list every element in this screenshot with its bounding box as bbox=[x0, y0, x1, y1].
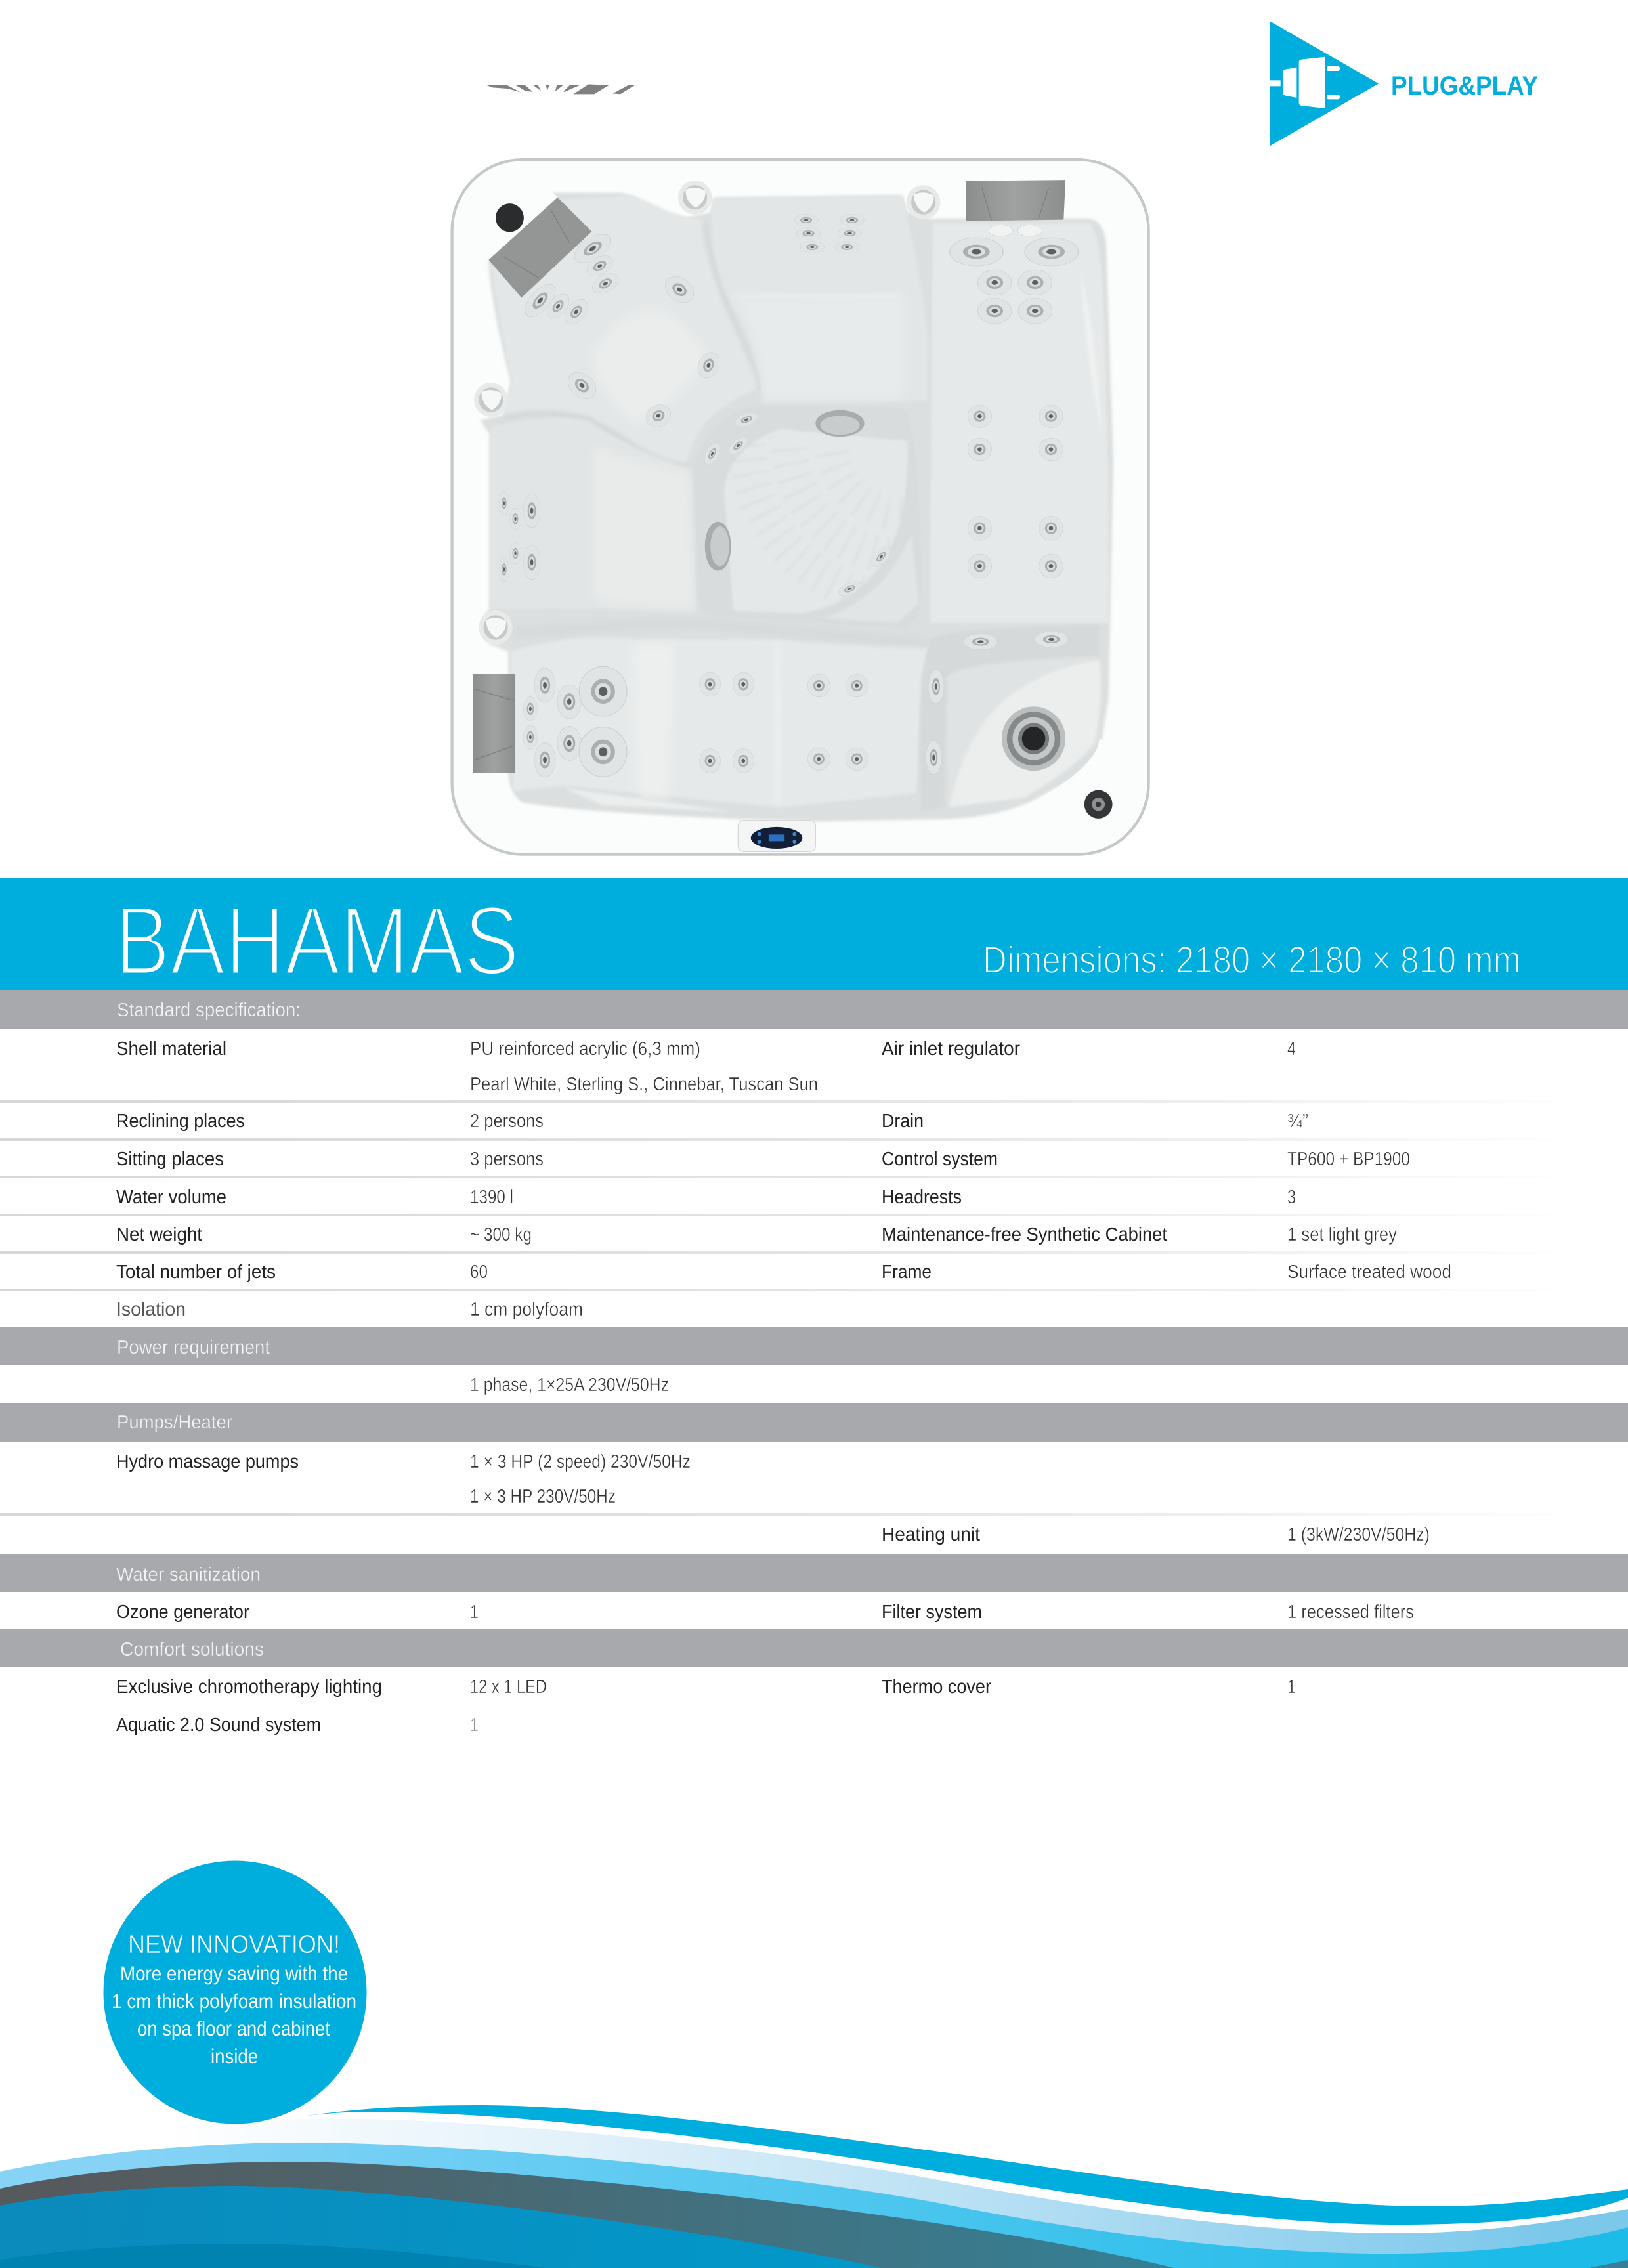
specification rows right: Drain bbox=[882, 1111, 924, 1132]
section: power requirement: Power requirement bbox=[117, 1337, 270, 1358]
section: comfort solutions: Comfort solutions bbox=[120, 1639, 264, 1660]
top left lounge seat bbox=[492, 195, 760, 466]
callout body: More energy saving with the bbox=[120, 1962, 348, 1985]
specification rows left: PU reinforced acrylic (6,3 mm) bbox=[470, 1038, 700, 1059]
specification rows right: 4 bbox=[1287, 1038, 1296, 1059]
rim bump bottom right bbox=[1029, 738, 1128, 824]
section: comfort solutions bbox=[0, 1629, 1628, 1736]
specification rows left: 2 persons bbox=[470, 1111, 544, 1132]
specification rows right: 1 set light grey bbox=[1287, 1224, 1397, 1245]
wave: light blue band bbox=[0, 2143, 1628, 2268]
drain bbox=[1002, 706, 1065, 771]
specification rows left: Net weight bbox=[116, 1224, 202, 1245]
section: comfort solutions: 12 x 1 LED bbox=[470, 1677, 547, 1698]
specification rows right: ¾” bbox=[1287, 1111, 1308, 1132]
section: power requirement bbox=[0, 1327, 1628, 1396]
specification rows right: TP600 + BP1900 bbox=[1287, 1149, 1410, 1170]
spa well bbox=[480, 193, 1113, 821]
massage jets bbox=[499, 214, 1078, 777]
dimensions: Dimensions: 2180 × 2180 × 810 mm bbox=[983, 939, 1521, 981]
section bar bbox=[0, 990, 1628, 1029]
section: water sanitization: 1 recessed filters bbox=[1287, 1602, 1414, 1623]
acrylic rim bbox=[452, 160, 1149, 855]
section: water sanitization: Water sanitization bbox=[116, 1564, 261, 1585]
section: comfort solutions: Aquatic 2.0 Sound system bbox=[116, 1715, 321, 1736]
plug and play badge bbox=[1270, 21, 1538, 146]
specification rows left: 60 bbox=[470, 1262, 488, 1283]
section: power requirement: 1 phase, 1×25A 230V/50Hz bbox=[470, 1375, 669, 1396]
callout: new innovation bbox=[104, 1860, 366, 2124]
footer waves bbox=[0, 2105, 1628, 2268]
skimmer filters bbox=[705, 410, 865, 571]
plug and play label: PLUG&PLAY bbox=[1391, 72, 1538, 100]
logo fragment artefact bbox=[487, 84, 635, 94]
left seat bbox=[490, 418, 696, 613]
specification rows left: Total number of jets bbox=[116, 1262, 276, 1283]
section: pumps and heater: 1 (3kW/230V/50Hz) bbox=[1287, 1524, 1430, 1545]
section: water sanitization: Ozone generator bbox=[116, 1602, 249, 1623]
section: water sanitization bbox=[0, 1554, 1628, 1623]
section: pumps and heater: Pumps/Heater bbox=[117, 1412, 232, 1433]
specification rows left: 3 persons bbox=[470, 1149, 544, 1170]
section: water sanitization: Filter system bbox=[882, 1602, 982, 1623]
specification rows left: 1 cm polyfoam bbox=[470, 1299, 583, 1320]
section: standard specification bbox=[0, 990, 1628, 1029]
specification rows right: Control system bbox=[882, 1149, 998, 1170]
section: pumps and heater: Heating unit bbox=[882, 1524, 980, 1545]
specification rows left: Water volume bbox=[116, 1187, 226, 1208]
section: comfort solutions: 1 bbox=[470, 1715, 479, 1736]
pillow clips bbox=[474, 181, 940, 645]
row dividers bbox=[0, 1100, 1628, 1516]
specification rows right: Headrests bbox=[882, 1187, 962, 1208]
section: pumps and heater bbox=[0, 1403, 1628, 1545]
specification rows left: Sitting places bbox=[116, 1149, 224, 1170]
specification rows left: Isolation bbox=[116, 1299, 186, 1320]
wave: corner accent bbox=[1589, 2260, 1628, 2268]
right seat bbox=[930, 223, 1109, 623]
headrest bottom left bbox=[473, 674, 515, 773]
rim bump top left bbox=[473, 181, 557, 261]
wave: slate band bbox=[0, 2162, 1174, 2268]
headrest top right bbox=[966, 180, 1065, 221]
headrest top left bbox=[488, 198, 592, 297]
callout body: 1 cm thick polyfoam insulation bbox=[112, 1990, 356, 2013]
callout heading: NEW INNOVATION! bbox=[128, 1931, 340, 1959]
specification rows right: Air inlet regulator bbox=[882, 1038, 1020, 1059]
section: comfort solutions: Thermo cover bbox=[882, 1677, 991, 1698]
footwell floor with ribs bbox=[724, 429, 907, 613]
specification rows right: 3 bbox=[1287, 1187, 1296, 1208]
specification rows left: 1390 l bbox=[470, 1187, 513, 1208]
specification rows left bbox=[116, 1038, 818, 1320]
specification rows right bbox=[882, 1038, 1451, 1283]
specification rows left: Shell material bbox=[116, 1038, 226, 1059]
callout body: on spa floor and cabinet bbox=[137, 2017, 330, 2040]
section: comfort solutions: Exclusive chromotherapy lighting bbox=[116, 1677, 382, 1698]
air controls bbox=[989, 225, 1042, 236]
wave: top swoosh bbox=[303, 2105, 1628, 2225]
title band bbox=[0, 878, 1628, 995]
specification rows left: Pearl White, Sterling S., Cinnebar, Tuscan Sun bbox=[470, 1074, 818, 1095]
top centre seat bbox=[711, 196, 928, 403]
section: pumps and heater: 1 × 3 HP (2 speed) 230V/50Hz bbox=[470, 1451, 691, 1472]
callout body: inside bbox=[211, 2045, 258, 2068]
bottom right seat bbox=[920, 625, 1101, 812]
wave: deep blue band bbox=[0, 2244, 545, 2268]
icon: speaker top left bbox=[496, 203, 524, 232]
section heading: Standard specification: bbox=[117, 1000, 301, 1021]
spa top view illustration bbox=[452, 160, 1149, 855]
icon: plug in triangle bbox=[1270, 21, 1379, 146]
callout body bbox=[112, 1962, 356, 2068]
specification rows right: Surface treated wood bbox=[1287, 1262, 1451, 1283]
specification rows left: Reclining places bbox=[116, 1111, 245, 1132]
bottom long seat bbox=[511, 623, 930, 812]
section: pumps and heater: 1 × 3 HP 230V/50Hz bbox=[470, 1486, 616, 1507]
icon: speaker bottom right bbox=[1084, 790, 1113, 819]
specification rows right: Maintenance-free Synthetic Cabinet bbox=[882, 1224, 1167, 1245]
specification rows left: ~ 300 kg bbox=[470, 1224, 532, 1245]
section: comfort solutions: 1 bbox=[1287, 1677, 1296, 1698]
wave: blue band bbox=[0, 2186, 881, 2268]
control panel bbox=[738, 821, 815, 851]
specification rows right: Frame bbox=[882, 1262, 932, 1283]
wave: pale band bbox=[0, 2119, 1628, 2268]
model name: BAHAMAS bbox=[115, 886, 519, 995]
section: pumps and heater: Hydro massage pumps bbox=[116, 1451, 299, 1472]
section: water sanitization: 1 bbox=[470, 1602, 479, 1623]
footwell bbox=[726, 431, 905, 611]
